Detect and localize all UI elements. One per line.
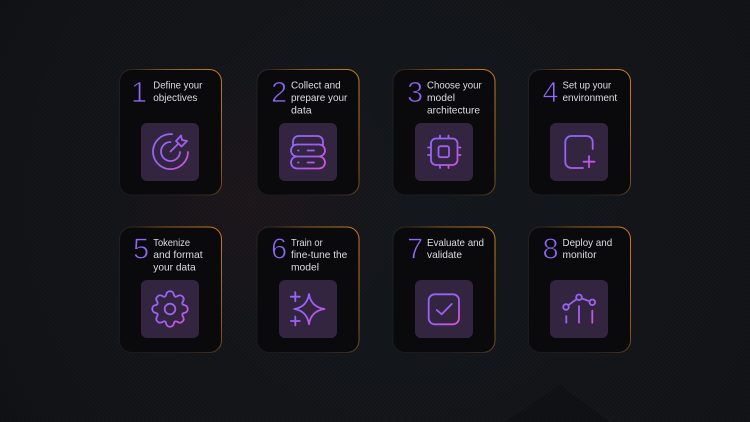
panel: step 5 bbox=[120, 227, 222, 352]
number 3: 3 bbox=[407, 77, 423, 109]
icon tile: gear bbox=[141, 280, 199, 338]
panel: step 2 bbox=[257, 70, 359, 195]
text: choose your model architecture: Choose your bbox=[427, 80, 482, 92]
icon tile: line chart bbox=[550, 280, 608, 338]
icon tile: chip bbox=[415, 123, 473, 181]
text: deploy and monitor: monitor bbox=[562, 250, 597, 261]
text: set up your environment: Set up your bbox=[562, 80, 612, 92]
panel: step 8 bbox=[528, 227, 630, 352]
text: evaluate and validate: validate bbox=[427, 250, 462, 261]
text: tokenize and format your data: Tokenize bbox=[153, 238, 190, 249]
text: choose your model architecture: architecture bbox=[427, 105, 480, 116]
text: set up your environment: environment bbox=[562, 93, 617, 104]
icon tile: new document bbox=[550, 123, 608, 181]
panel: step 7 bbox=[393, 227, 495, 352]
number 8: 8 bbox=[542, 234, 559, 266]
text: tokenize and format your data: and format bbox=[153, 250, 203, 261]
icon tile: sparkle bbox=[279, 280, 337, 338]
panel: step 1 bbox=[120, 70, 222, 195]
panel: step 3 bbox=[393, 70, 495, 195]
text: choose your model architecture: model bbox=[427, 93, 455, 104]
icon tile: database bbox=[279, 123, 337, 181]
icon tile: checkbox bbox=[415, 280, 473, 338]
text: train or fine-tune the model: model bbox=[291, 263, 319, 274]
text: tokenize and format your data: your data bbox=[153, 263, 196, 274]
text: train or fine-tune the model: Train or bbox=[291, 238, 323, 249]
text: collect and prepare your data: prepare your bbox=[291, 93, 348, 104]
number 6: 6 bbox=[271, 234, 287, 266]
number 7: 7 bbox=[407, 234, 423, 266]
text: evaluate and validate: Evaluate and bbox=[427, 238, 484, 249]
text: define your objectives: objectives bbox=[153, 93, 197, 104]
number 1: 1 bbox=[131, 77, 147, 109]
text: define your objectives: Define your bbox=[153, 80, 203, 92]
panel: step 4 bbox=[528, 70, 630, 195]
panel: step 6 bbox=[257, 227, 359, 352]
number 4: 4 bbox=[542, 77, 559, 109]
icon tile: target bbox=[141, 123, 199, 181]
text: train or fine-tune the model: fine-tune the bbox=[291, 250, 348, 261]
text: collect and prepare your data: Collect and bbox=[291, 80, 341, 92]
number 5: 5 bbox=[133, 234, 149, 266]
text: collect and prepare your data: data bbox=[291, 105, 312, 116]
text: deploy and monitor: Deploy and bbox=[562, 238, 612, 249]
number 2: 2 bbox=[271, 77, 287, 109]
